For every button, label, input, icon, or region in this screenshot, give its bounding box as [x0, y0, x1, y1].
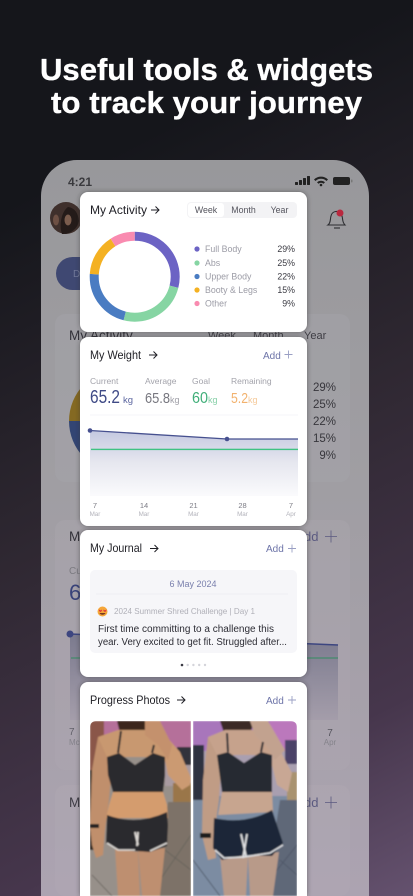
background activity widget: My Activity	[69, 328, 133, 343]
chart date axis: Mar	[139, 511, 149, 518]
background weight widget: M	[69, 529, 80, 544]
background activity widget: 9%	[319, 450, 336, 462]
chart date axis: 14	[140, 501, 148, 510]
title	[40, 52, 373, 120]
background panels	[55, 314, 350, 482]
chart date axis: Mar	[237, 511, 248, 518]
chart date axis: 21	[189, 501, 198, 510]
background activity widget: 25%	[313, 399, 336, 411]
journal entry: 6 May 2024	[169, 579, 217, 589]
donut legend	[194, 244, 295, 308]
weight stats: 65.2	[90, 387, 120, 407]
add button	[266, 696, 296, 707]
background weight widget: 6	[69, 580, 81, 605]
background activity widget: Month	[253, 330, 284, 342]
donut legend: Booty & Legs	[205, 285, 258, 295]
before photo	[90, 721, 191, 896]
background activity widget: Year	[304, 330, 327, 342]
background activity widget: 29%	[313, 382, 336, 394]
weight stats: kg	[208, 395, 218, 405]
weight stats: kg	[123, 395, 133, 406]
background weight widget: 7	[69, 727, 75, 738]
pagination dots	[181, 664, 206, 666]
add button	[263, 350, 292, 362]
card: my journal	[80, 530, 307, 677]
photos heading: Progress Photos	[90, 693, 170, 707]
background weight widget: Mc	[69, 738, 80, 747]
weight heading: My Weight	[90, 348, 142, 362]
weight stats: Current	[90, 376, 119, 386]
activity heading: My Activity	[90, 203, 147, 217]
chart date axis: Apr	[286, 511, 296, 518]
donut legend: 25%	[277, 258, 295, 268]
donut legend: 9%	[282, 298, 295, 308]
donut legend: 22%	[277, 272, 295, 282]
background activity widget	[69, 328, 336, 473]
card: progress photos	[80, 682, 307, 896]
donut legend: 15%	[277, 285, 295, 295]
chart date axis: Mar	[90, 511, 100, 518]
weight stats: Remaining	[231, 376, 272, 386]
icon: heart eyes emoji	[98, 606, 108, 616]
add button: Add	[266, 696, 284, 707]
donut legend: Full Body	[205, 244, 242, 254]
background activity widget: 22%	[313, 416, 336, 428]
title: Useful tools & widgets	[40, 52, 373, 87]
journal entry: 2024 Summer Shred Challenge | Day 1	[114, 606, 255, 616]
after photo	[193, 721, 297, 896]
phone mockup	[41, 160, 369, 896]
card: my weight	[80, 337, 307, 526]
weight stats: 65.8	[145, 390, 170, 407]
weight stats: Average	[145, 376, 177, 386]
chart date axis: 7	[93, 501, 97, 510]
background weight widget: Apr	[324, 738, 337, 747]
background weight widget: 7	[327, 728, 333, 739]
filter pill	[56, 257, 116, 290]
status bar icons	[295, 176, 352, 186]
background journal widget	[69, 795, 337, 810]
donut legend: Other	[205, 298, 227, 308]
journal heading: My Journal	[90, 541, 142, 555]
period tabs: Month	[231, 205, 256, 215]
status bar time: 4:21	[68, 175, 92, 189]
chart date axis: 7	[289, 501, 293, 510]
period tabs: Year	[271, 205, 288, 215]
donut legend: 29%	[277, 244, 295, 254]
background journal widget: dd	[304, 795, 318, 810]
weight stats: kg	[248, 395, 258, 405]
chart date axis: 28	[238, 501, 247, 510]
add button: Add	[263, 351, 281, 362]
chart date axis	[90, 501, 296, 518]
chart date axis: Mar	[188, 511, 199, 518]
period tabs	[187, 202, 297, 218]
background weight widget: Cu	[69, 566, 82, 577]
journal entry: year. Very excited to get fit. Struggled after...	[98, 637, 287, 648]
background activity widget: Week	[208, 330, 236, 342]
background weight widget	[66, 529, 338, 747]
weight line chart	[88, 415, 298, 495]
journal entry	[90, 570, 297, 653]
donut legend: Upper Body	[205, 272, 252, 282]
journal entry: First time committing to a challenge this	[98, 624, 274, 635]
filter pill: D	[73, 269, 80, 280]
weight stats: kg	[170, 395, 180, 405]
weight stats: Goal	[192, 376, 210, 386]
donut chart	[94, 236, 175, 317]
background journal widget: M	[69, 795, 80, 810]
weight stats: 5.2	[231, 390, 248, 407]
add button: Add	[266, 544, 284, 555]
background activity widget: 15%	[313, 433, 336, 445]
bell icon	[328, 210, 345, 228]
background weight widget: dd	[304, 529, 318, 544]
card: my activity	[80, 192, 307, 332]
weight stats	[90, 376, 272, 407]
weight stats: 60	[192, 390, 208, 407]
add button	[266, 544, 296, 555]
avatar	[50, 202, 82, 234]
title: to track your journey	[51, 85, 363, 120]
donut legend: Abs	[205, 258, 221, 268]
period tabs: Week	[195, 205, 218, 215]
